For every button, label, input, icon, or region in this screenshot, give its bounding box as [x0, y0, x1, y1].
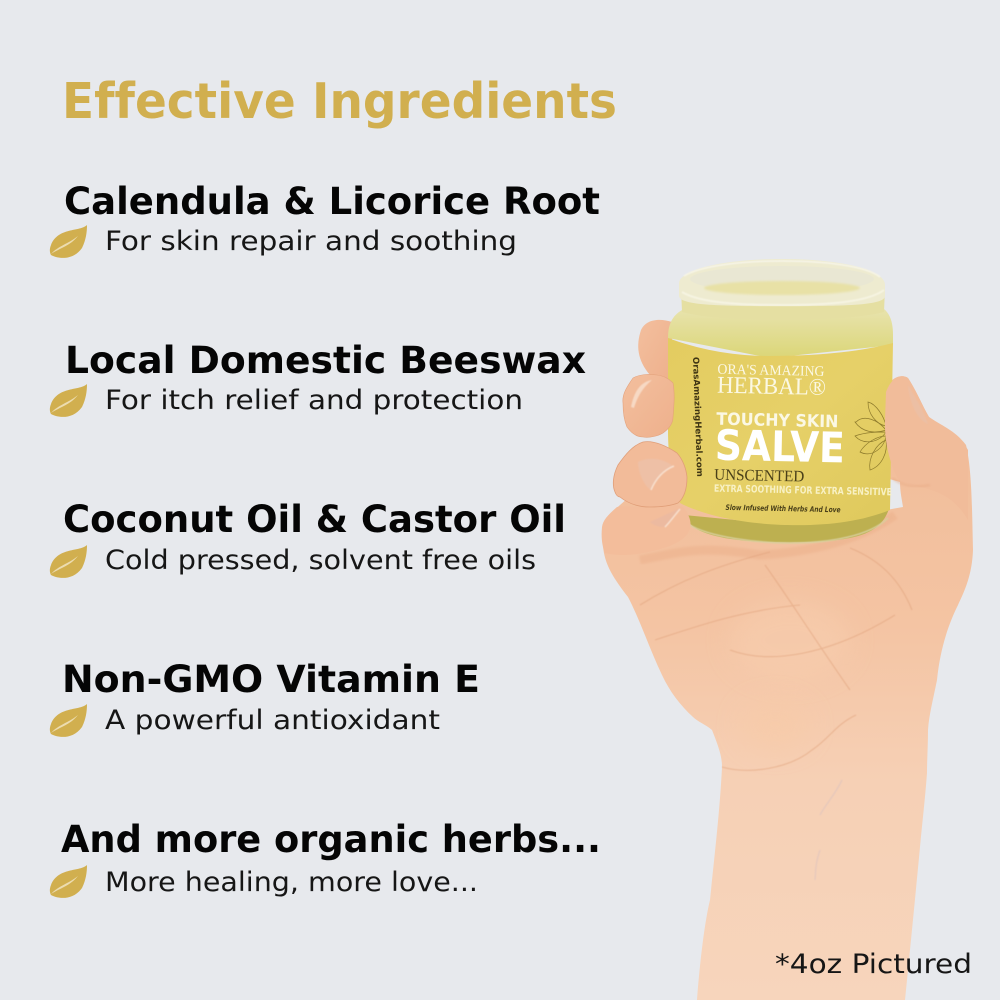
- label brand text: UNSCENTED: [714, 467, 804, 486]
- description: More healing, more love...: [105, 867, 478, 898]
- footnote: *4oz Pictured: [775, 949, 972, 980]
- icon: leaf: [50, 545, 87, 578]
- icon: leaf: [50, 384, 87, 417]
- label flower illustration: [855, 402, 886, 470]
- ingredient: local domestic beeswax: [50, 339, 586, 417]
- icon: leaf: [50, 704, 87, 737]
- label brand text: Slow Infused With Herbs And Love: [725, 503, 841, 514]
- fingernails: [631, 380, 680, 527]
- description: For itch relief and protection: [105, 385, 523, 416]
- shadow below jar and fingers: [640, 515, 895, 560]
- thumb nail: [908, 385, 928, 424]
- jar glass base: [684, 505, 890, 542]
- heading: local domestic beeswax: Local Domestic Beeswax: [65, 339, 586, 382]
- label brand text: [713, 362, 895, 515]
- ingredient: calendula and licorice root: [50, 180, 600, 258]
- photo: hand holding salve jar: [602, 259, 973, 1000]
- label side text: OrasAmazingHerbal.com: [690, 357, 704, 477]
- heading: more organic herbs: And more organic herbs...: [61, 818, 601, 861]
- wrist veins: [815, 780, 842, 880]
- ingredient: non-GMO vitamin E: [50, 658, 480, 737]
- label brand text: EXTRA SOOTHING FOR EXTRA SENSITIVE: [714, 484, 892, 498]
- jar shoulder with balm: [668, 309, 893, 358]
- heading: coconut oil and castor oil: Coconut Oil & Castor Oil: [63, 498, 566, 541]
- ingredient: more organic herbs: [50, 818, 601, 898]
- palm creases: [640, 548, 912, 770]
- jar label: [668, 338, 895, 525]
- thumb: [885, 376, 968, 520]
- description: Cold pressed, solvent free oils: [105, 545, 536, 576]
- icon: leaf: [50, 865, 87, 898]
- label brand text: HERBAL®: [717, 373, 826, 401]
- description: A powerful antioxidant: [105, 705, 440, 736]
- ingredient: coconut oil and castor oil: [50, 498, 566, 578]
- label brand text: TOUCHY SKIN: [716, 410, 839, 432]
- index finger behind jar: [638, 320, 672, 380]
- gap between thumb and jar: [886, 478, 903, 510]
- description: For skin repair and soothing: [105, 226, 517, 257]
- title: Effective Ingredients: [62, 73, 617, 130]
- heading: non-GMO vitamin E: Non-GMO Vitamin E: [62, 658, 480, 701]
- label brand text: SALVE: [714, 421, 845, 472]
- jar: [668, 259, 895, 543]
- jar neck: [681, 288, 885, 320]
- little finger: [602, 505, 691, 555]
- heading: calendula and licorice root: Calendula & Licorice Root: [64, 180, 600, 223]
- jar rim: [679, 259, 885, 306]
- ring finger: [613, 442, 687, 507]
- icon: leaf: [50, 225, 87, 258]
- hand and wrist: [603, 376, 973, 1000]
- label brand text: ORA'S AMAZING: [717, 362, 825, 380]
- middle finger: [623, 374, 674, 437]
